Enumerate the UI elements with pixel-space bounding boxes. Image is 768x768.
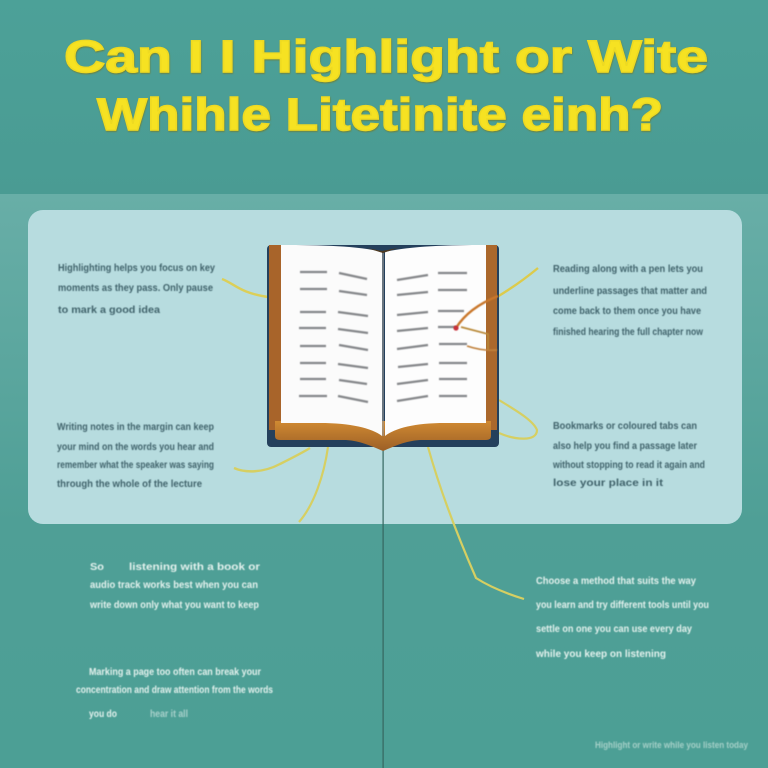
book leather spine right <box>485 245 497 430</box>
connector: lower centre left <box>299 447 328 522</box>
lower background <box>0 194 768 768</box>
lower text: right <box>535 575 709 660</box>
lower text: left top: So <box>90 561 104 573</box>
notes: upper right: Reading along with a pen lets you <box>553 263 703 275</box>
title: Can I I Highlight or Wite <box>64 31 708 82</box>
lower text: left bottom: hear it all <box>150 708 188 720</box>
notes: upper left <box>58 262 215 316</box>
connector: lower left <box>234 448 310 471</box>
lower text: left top: audio track works best when you can <box>90 579 258 591</box>
top notch <box>367 248 398 253</box>
lower text: right: Choose a method that suits the way <box>536 575 696 587</box>
notes: lower right <box>552 420 705 489</box>
notes: upper right <box>553 263 707 338</box>
notes: upper right: underline passages that matter and <box>553 285 707 297</box>
notes: upper left: Highlighting helps you focus on key <box>58 262 215 274</box>
lower text: left bottom: concentration and draw attention from the words <box>76 684 273 696</box>
connector: upper left <box>222 279 268 297</box>
notes: lower right: Bookmarks or coloured tabs can <box>553 420 697 432</box>
notes: upper left: moments as they pass. Only pause <box>58 282 213 294</box>
text lines: right page <box>397 273 467 401</box>
notes: upper right: come back to them once you have <box>553 305 701 317</box>
right page <box>385 245 486 436</box>
lower text: left bottom: Marking a page too often can break your <box>89 666 261 678</box>
notes: lower right: without stopping to read it again and <box>552 459 705 471</box>
notes: lower left: through the whole of the lecture <box>57 478 202 490</box>
notes: lower right: also help you find a passage later <box>553 440 697 452</box>
book cover <box>267 245 499 447</box>
notes: lower left: your mind on the words you hear and <box>57 441 214 453</box>
footer note: Highlight or write while you listen today <box>595 740 748 750</box>
vertical divider <box>382 450 384 768</box>
lower text: right: while you keep on listening <box>535 648 666 660</box>
connector: upper right <box>497 268 538 297</box>
text lines: left page <box>299 272 368 402</box>
connector: lower centre right <box>428 447 524 599</box>
lower text: left top <box>89 561 260 611</box>
notes: upper left: to mark a good idea <box>58 304 160 316</box>
panel: book and notes <box>28 210 742 524</box>
notes: lower left: remember what the speaker was saying <box>57 459 214 471</box>
title <box>64 31 708 140</box>
title: Whihle Litetinite einh? <box>97 89 663 140</box>
red pen marks <box>453 296 498 350</box>
lower text: right: settle on one you can use every day <box>536 623 692 635</box>
header background <box>0 0 768 194</box>
book leather spine left <box>269 245 282 430</box>
notes: upper right: finished hearing the full chapter now <box>553 326 704 338</box>
lower text: right: you learn and try different tools until you <box>536 599 709 611</box>
connector: right lower loop <box>499 400 537 439</box>
notes: lower right: lose your place in it <box>553 477 664 489</box>
book bottom edge <box>275 421 491 451</box>
lower text: left top: listening with a book or <box>129 561 260 573</box>
gutter <box>382 252 384 436</box>
book <box>267 245 499 451</box>
lower text: left bottom: you do <box>89 708 117 720</box>
lower text: left top: write down only what you want to keep <box>89 599 259 611</box>
notes: lower left <box>57 421 214 490</box>
notes: lower left: Writing notes in the margin can keep <box>57 421 214 433</box>
left page <box>281 245 382 436</box>
lower text: left bottom <box>76 666 273 720</box>
